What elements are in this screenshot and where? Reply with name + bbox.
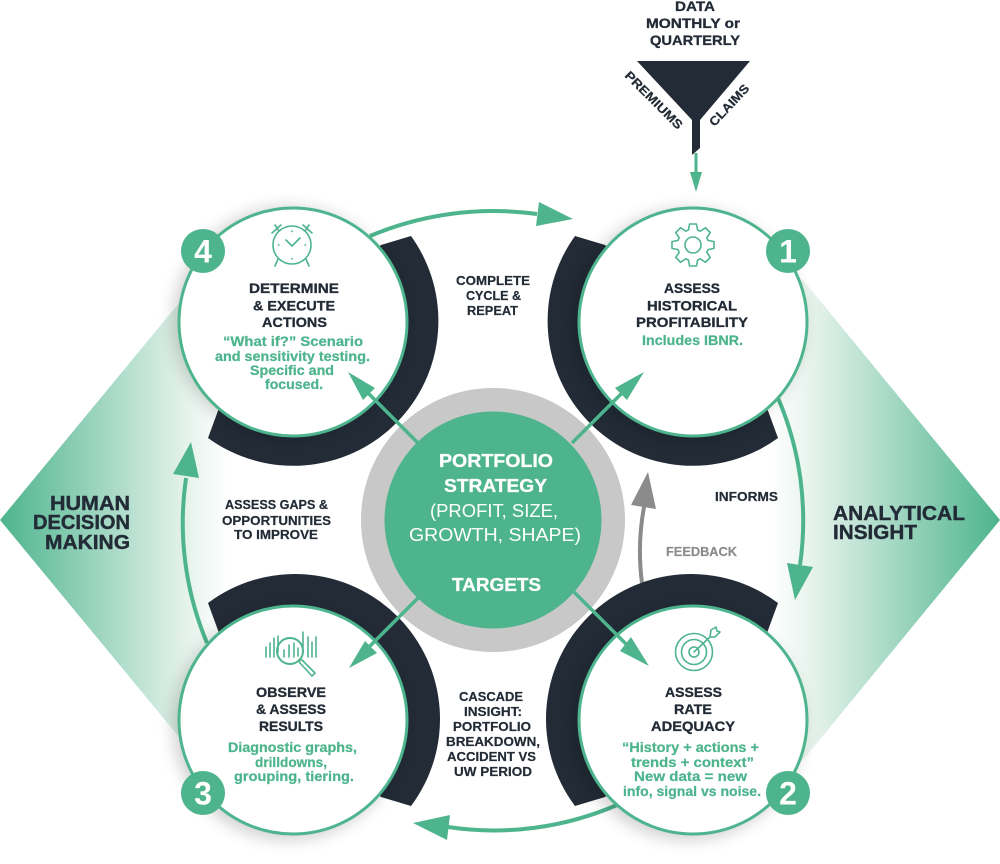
step 4 description: Specific and — [250, 362, 334, 378]
hub arrow: to step 2 — [574, 592, 649, 666]
funnel heading — [646, 0, 741, 48]
step 3 heading: OBSERVE — [256, 684, 326, 700]
icon: target with dart — [676, 627, 720, 670]
label: informs: INFORMS — [715, 490, 778, 504]
icon: gear — [672, 224, 714, 266]
hub arrow: to step 4 — [348, 372, 418, 443]
funnel shape — [637, 61, 750, 155]
step 3 badge: 3 — [194, 776, 212, 812]
label: analytical insight: ANALYTICAL — [833, 502, 965, 525]
funnel label: claims: CLAIMS — [707, 82, 752, 129]
step 2 badge: 2 — [779, 776, 797, 812]
step 4 description: focused. — [265, 376, 323, 392]
hub text: STRATEGY — [444, 476, 547, 496]
step 1 description: Includes IBNR. — [642, 332, 743, 348]
right diamond: analytical insight — [770, 280, 1000, 760]
step 3 heading — [256, 684, 326, 734]
label: complete cycle and repeat — [456, 274, 530, 318]
step 3 description: grouping, tiering. — [234, 768, 354, 784]
cycle arrow: complete cycle — [370, 202, 573, 236]
hub text: TARGETS — [452, 575, 541, 595]
step 2 description — [622, 739, 761, 799]
label: human decision making: HUMAN — [50, 492, 130, 515]
dark arc: step 1 — [548, 236, 778, 466]
label: cascade insight: PORTFOLIO — [453, 720, 531, 734]
hub text: GROWTH, SHAPE) — [409, 525, 581, 545]
step 2 description: info, signal vs noise. — [623, 783, 761, 799]
step 2 description: “History + actions + — [622, 739, 759, 755]
step 4 description: and sensitivity testing. — [215, 348, 370, 364]
label: complete cycle and repeat: CYCLE & — [466, 289, 521, 303]
left diamond: human decision making — [0, 303, 230, 737]
step 4 description — [215, 333, 370, 392]
label: assess gaps — [222, 498, 331, 542]
label: analytical insight: INSIGHT — [833, 521, 917, 544]
label: cascade insight: UW PERIOD — [454, 765, 532, 779]
step 2 panel — [579, 606, 810, 834]
cycle arrow: informs — [778, 398, 813, 600]
label: human decision making — [33, 492, 130, 554]
step 4 badge: 4 — [194, 234, 212, 270]
step 4 heading — [249, 280, 339, 330]
funnel heading: MONTHLY or — [646, 15, 741, 31]
step 2 heading: RATE — [674, 701, 712, 717]
step 3 panel — [179, 606, 407, 834]
label: human decision making: DECISION — [33, 511, 130, 534]
step 3 heading: RESULTS — [259, 718, 323, 734]
step 3 description — [228, 739, 357, 784]
step 1 panel — [579, 208, 810, 436]
step 4 heading: & EXECUTE — [253, 298, 335, 314]
label: feedback: FEEDBACK — [666, 545, 737, 559]
label: cascade insight — [446, 690, 540, 779]
label: cascade insight: INSIGHT: — [464, 705, 522, 719]
step 1 badge — [766, 229, 810, 273]
label: cascade insight: BREAKDOWN, — [446, 735, 540, 749]
label: complete cycle and repeat: COMPLETE — [456, 274, 530, 288]
hub arrow: to step 1 — [572, 372, 644, 443]
icon: alarm clock — [272, 225, 312, 266]
step 3 description: drilldowns, — [255, 754, 327, 770]
funnel heading: QUARTERLY — [650, 32, 741, 48]
step 1 heading: ASSESS — [664, 280, 720, 296]
step 4 description: “What if?” Scenario — [223, 333, 363, 349]
shadow: step circles — [173, 207, 803, 840]
step 4 panel — [179, 208, 407, 436]
hub text: PORTFOLIO — [439, 451, 553, 471]
label: assess gaps: TO IMPROVE — [234, 528, 318, 542]
step 3 heading: & ASSESS — [256, 701, 326, 717]
feedback arrow — [631, 472, 656, 583]
label: cascade insight: ACCIDENT VS — [447, 750, 536, 764]
label: human decision making: MAKING — [45, 531, 130, 554]
label: assess gaps: OPPORTUNITIES — [222, 514, 331, 528]
hub arrow: to step 3 — [349, 598, 418, 668]
dark arc: step 3 — [208, 574, 440, 806]
step 2 badge — [766, 771, 810, 815]
step 2 description: New data = new — [634, 768, 747, 784]
step 3 badge — [181, 771, 225, 815]
icon: magnifier over bars — [266, 632, 316, 676]
step 4 heading: DETERMINE — [249, 280, 339, 296]
step 4 badge — [181, 229, 225, 273]
step 3 description: Diagnostic graphs, — [228, 739, 357, 755]
label: assess gaps: ASSESS GAPS & — [225, 498, 328, 512]
arrow: funnel to step 1 — [690, 153, 702, 192]
cycle arrow: assess gaps — [173, 442, 207, 643]
step 2 heading: ADEQUACY — [651, 718, 736, 734]
label: complete cycle and repeat: REPEAT — [467, 304, 518, 318]
central hub: portfolio strategy — [361, 388, 625, 652]
dark arc: step 2 — [546, 574, 778, 806]
hub text: (PROFIT, SIZE, — [430, 501, 558, 521]
funnel label: premiums: PREMIUMS — [622, 69, 685, 132]
label: analytical insight — [833, 502, 965, 544]
hub text — [409, 451, 581, 595]
step 1 heading: HISTORICAL — [647, 298, 737, 314]
cycle arrow: cascade insight — [413, 805, 617, 840]
step 1 heading: PROFITABILITY — [636, 314, 749, 330]
step 2 heading — [651, 684, 736, 734]
step 2 heading: ASSESS — [665, 684, 722, 700]
funnel: data input — [622, 0, 752, 192]
step 4 heading: ACTIONS — [262, 314, 327, 330]
step 1 heading — [636, 280, 749, 330]
step 2 description: trends + context” — [631, 754, 754, 770]
label: cascade insight: CASCADE — [459, 690, 523, 704]
dark arc: step 4 — [208, 236, 438, 466]
step 1 badge: 1 — [779, 234, 797, 270]
